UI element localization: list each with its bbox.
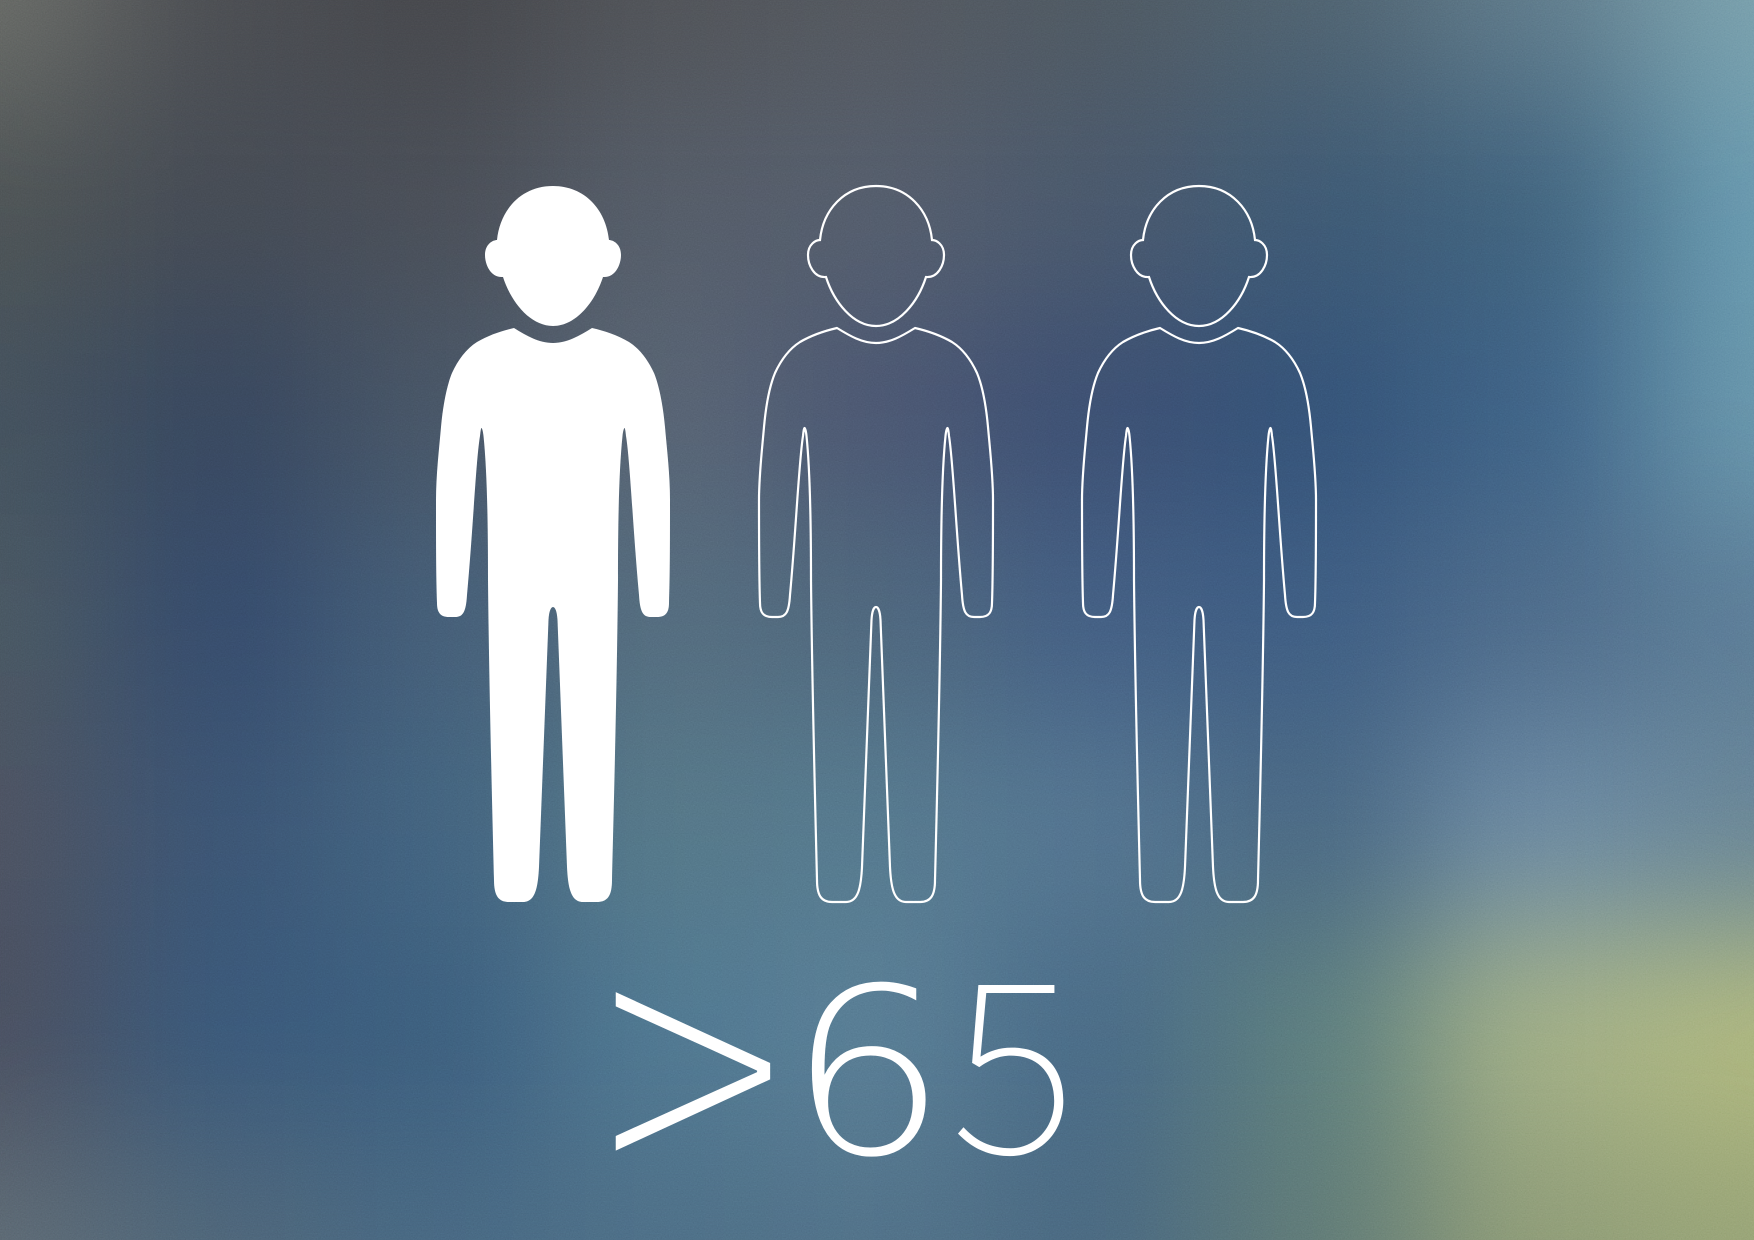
age label: >65: 5 — [951, 878, 1076, 1223]
icon: outlined person (second) — [759, 186, 993, 902]
icon: filled person (highlighted) — [436, 186, 670, 902]
age label: >65 — [603, 757, 1076, 1240]
icon: outlined person (third) — [1082, 186, 1316, 902]
age label: >65: 6 — [787, 940, 947, 1209]
